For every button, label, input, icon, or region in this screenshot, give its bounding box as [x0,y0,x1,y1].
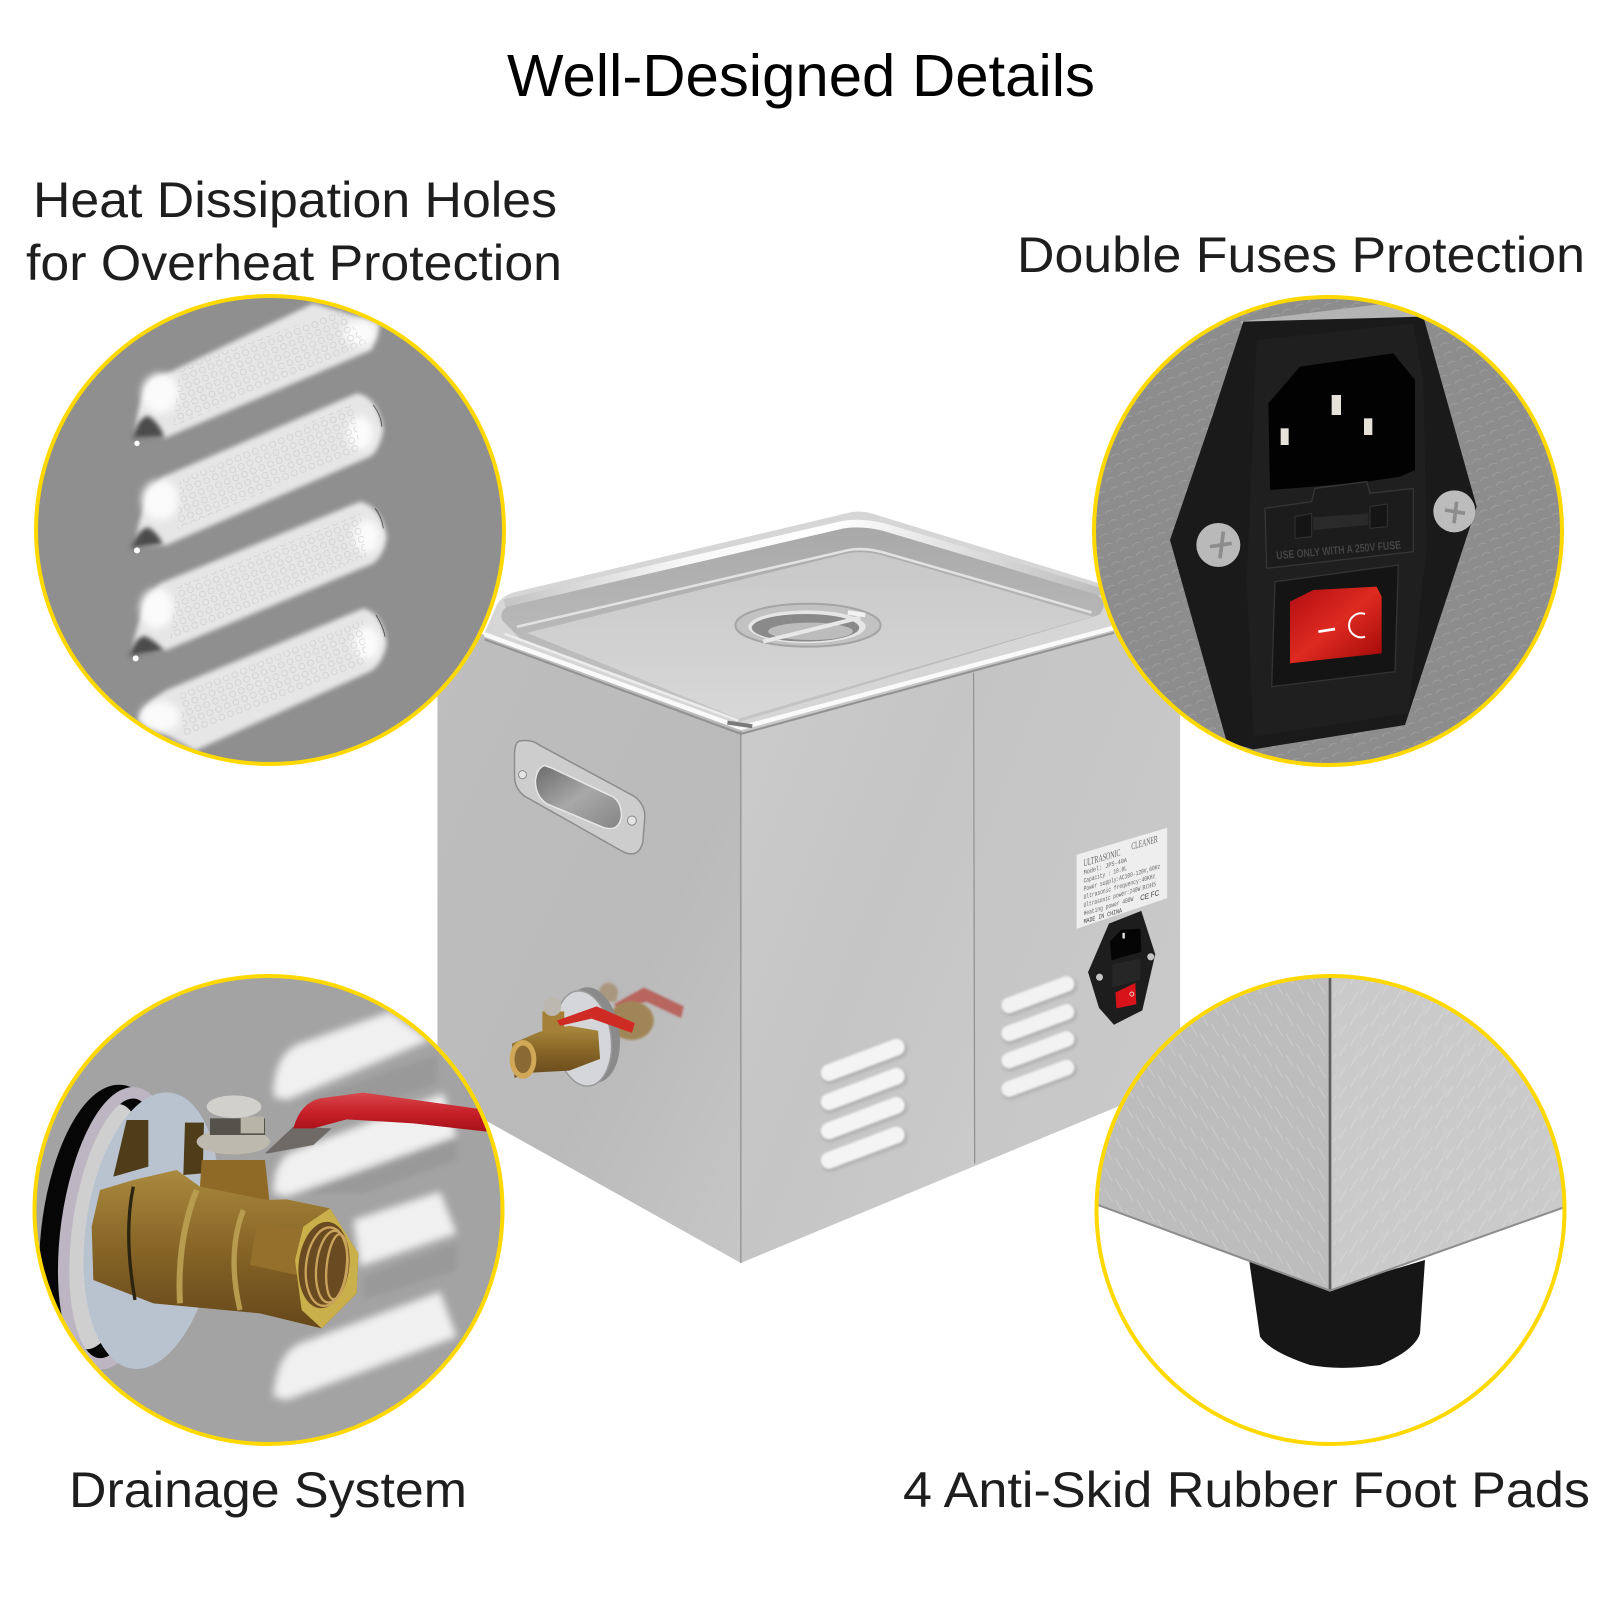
slot end creases [373,405,385,637]
rating label: Ultrasonic power:240W [1084,886,1140,910]
left steel face [1098,978,1330,1290]
power socket module [1088,911,1155,1025]
rating label: Model: JPS-40A [1084,857,1127,878]
rating label: Heating power 400W [1084,896,1133,918]
product: ultrasonic cleaner [437,511,1180,1263]
drain valve [510,983,684,1090]
slot shadows [129,416,164,657]
fuse holder: USE ONLY WITH A 250V FUSE [1276,539,1402,562]
corner seam [1328,978,1332,1290]
callout circle: double fuses protection [1092,295,1564,767]
right steel face [1330,978,1562,1290]
right face of tank [975,610,1180,1166]
rating label: ROHS [1142,881,1156,892]
callout circle: heat dissipation holes [36,296,504,764]
right vents [1009,984,1069,1091]
valve lever [265,1127,332,1153]
label: heat dissipation holes: Heat Dissipation Holes [33,172,557,228]
module front face [1247,323,1427,737]
rating label: ULTRASONIC [1084,848,1120,870]
rating label: MADE IN CHINA [1084,907,1122,927]
lid [485,511,1116,729]
label: heat dissipation holes: for Overheat Protection [26,235,562,291]
label: drainage system: Drainage System [69,1462,467,1518]
fuse holder [1265,482,1413,568]
specular dots [133,441,140,661]
front vents [829,1047,899,1162]
bottom edge [1098,1204,1562,1292]
rubber foot [1249,1260,1425,1368]
rocker switch bezel [1272,565,1398,687]
rating label: Ultrasonic frequency:40KHz [1084,873,1155,902]
valve stem [199,1160,269,1200]
embossed texture [1100,979,1560,1286]
drain flange rings [40,1084,216,1370]
red rocker switch [1290,587,1382,663]
valve brackets [113,1120,204,1177]
metal strip above module [1240,304,1417,324]
vent shadows [320,1059,454,1296]
dimpled steel texture [1096,299,1560,762]
rating label: Capacity : 10.0L [1084,865,1127,886]
socket pins [1281,395,1372,445]
label: heat dissipation holes [26,172,562,291]
rating label: Power supply:AC100-120V,60Hz [1084,863,1160,894]
label: anti-skid rubber foot pads: 4 Anti-Skid Rubber Foot Pads [903,1462,1590,1518]
callout circle: rubber foot pads [1080,960,1580,1444]
seams [741,673,975,1263]
IEC socket [1268,353,1415,490]
mounting screws [1196,490,1475,567]
brass valve body [92,1170,358,1328]
label: double fuses protection: Double Fuses Protection [1017,227,1585,283]
carry handle plate [515,741,645,854]
rating label [1077,828,1167,929]
fuse module body [1170,317,1477,749]
rating label: CLEANER [1131,834,1158,853]
bolt and washer [197,1095,270,1154]
rating label: CE FC [1140,888,1160,903]
lid rim highlight [485,628,1114,734]
callout circle: drainage system [24,976,503,1444]
bright ends of slots [140,320,380,732]
left face of tank [437,618,741,1263]
valve mouth with thread [294,1208,358,1328]
blurred vents behind valve [273,1012,457,1400]
slot dimples [170,310,367,737]
red lever handle [293,1093,487,1132]
front face of tank [741,666,975,1263]
title: Well-Designed Details [507,43,1095,109]
ventilation slots close-up [129,303,387,751]
lid handle [735,604,881,647]
